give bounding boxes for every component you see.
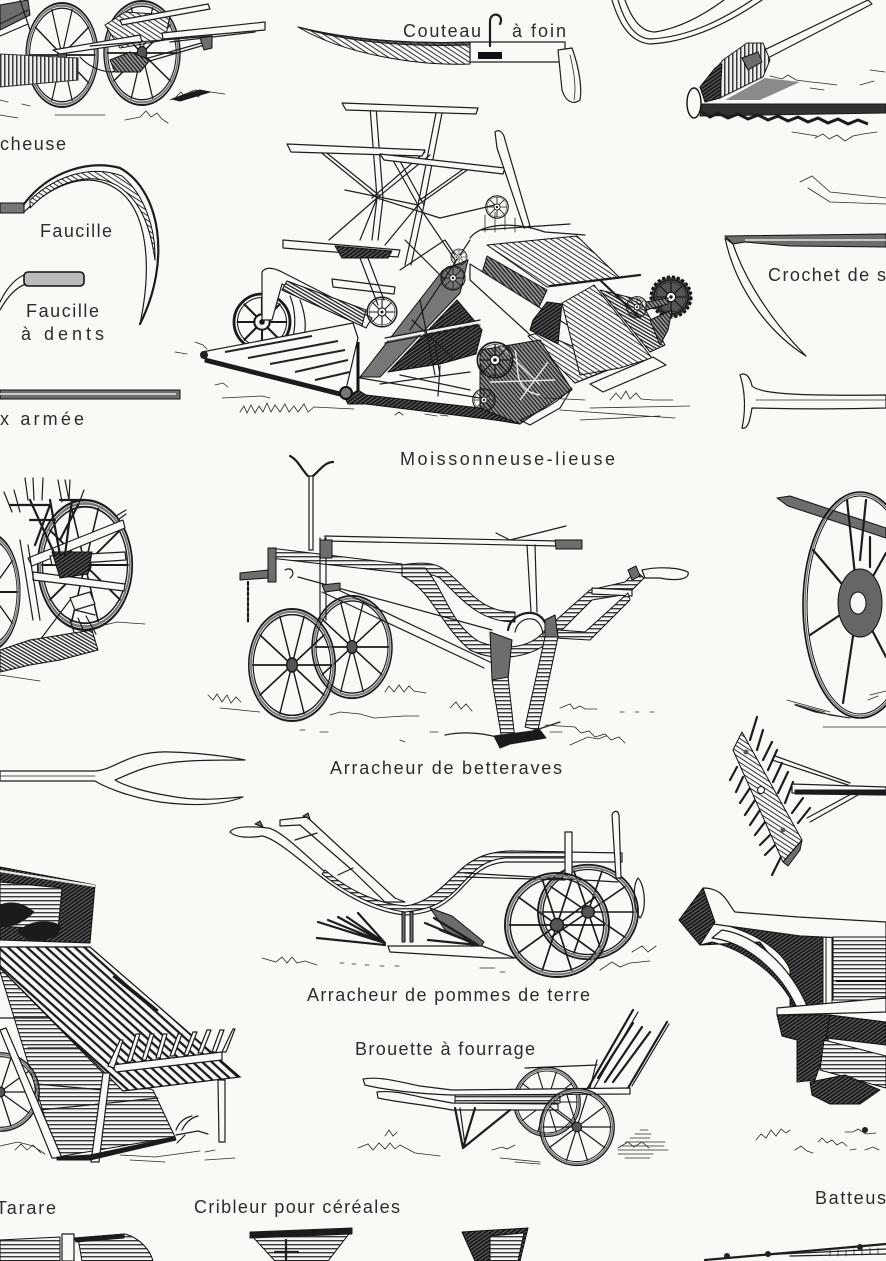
machine: faucheuse <box>0 0 265 154</box>
lever <box>495 131 530 228</box>
frame <box>240 456 688 748</box>
tool: fourche <box>0 752 245 805</box>
tool: râteau <box>730 717 886 875</box>
machine: batteuse barre basse <box>705 1244 886 1260</box>
label: Crochet de s <box>768 265 886 285</box>
label: Faucille <box>40 221 112 241</box>
left wheel and arch <box>234 294 290 350</box>
machine: faucheuse droite <box>687 0 886 141</box>
bottom machinery <box>480 340 572 424</box>
machine: brouette à fourrage <box>355 1010 669 1165</box>
machine: moissonneuse gauche <box>0 478 145 681</box>
upper deck <box>470 224 585 238</box>
machine: cribleur pour céréales <box>194 1197 528 1261</box>
label: Arracheur de betteraves <box>330 758 562 778</box>
label: Cribleur pour céréales <box>194 1197 400 1217</box>
label: x armée <box>0 409 84 429</box>
label: Couteau <box>403 21 481 41</box>
sloping panel <box>360 260 468 377</box>
machine: roue droite <box>777 492 886 727</box>
tool: crochet de sape <box>725 176 886 356</box>
tool: manche droit <box>740 374 886 428</box>
label: Arracheur de pommes de terre <box>307 985 590 1005</box>
curved plough handles top <box>612 0 762 44</box>
machine: tarare bas <box>0 1234 153 1261</box>
dark panel <box>478 256 547 320</box>
machine: arracheur de pommes de terre <box>230 811 656 1005</box>
label: Brouette à fourrage <box>355 1039 535 1059</box>
tool: couteau à foin <box>298 15 581 102</box>
label: Faucille <box>26 301 99 321</box>
label: à foin <box>512 21 566 41</box>
label: Moissonneuse-lieuse <box>400 449 615 469</box>
machine: arracheur de betteraves <box>208 456 688 778</box>
reel <box>283 103 505 294</box>
seat <box>335 246 392 258</box>
grass <box>175 342 690 420</box>
label: cheuse <box>0 134 66 154</box>
tool: faucille <box>0 165 158 324</box>
tool: faucille à dents <box>0 272 104 344</box>
striped panel <box>562 285 652 375</box>
machine: moissonneuse-lieuse <box>175 103 691 469</box>
gears <box>651 277 691 317</box>
grass <box>208 685 654 745</box>
machine: tarare <box>0 867 240 1218</box>
tool: faux armée <box>0 390 180 429</box>
platform <box>202 323 358 398</box>
machine: batteuse <box>679 888 886 1208</box>
label: Batteus <box>815 1188 886 1208</box>
dark cavity <box>388 300 482 372</box>
label: à dents <box>21 324 104 344</box>
